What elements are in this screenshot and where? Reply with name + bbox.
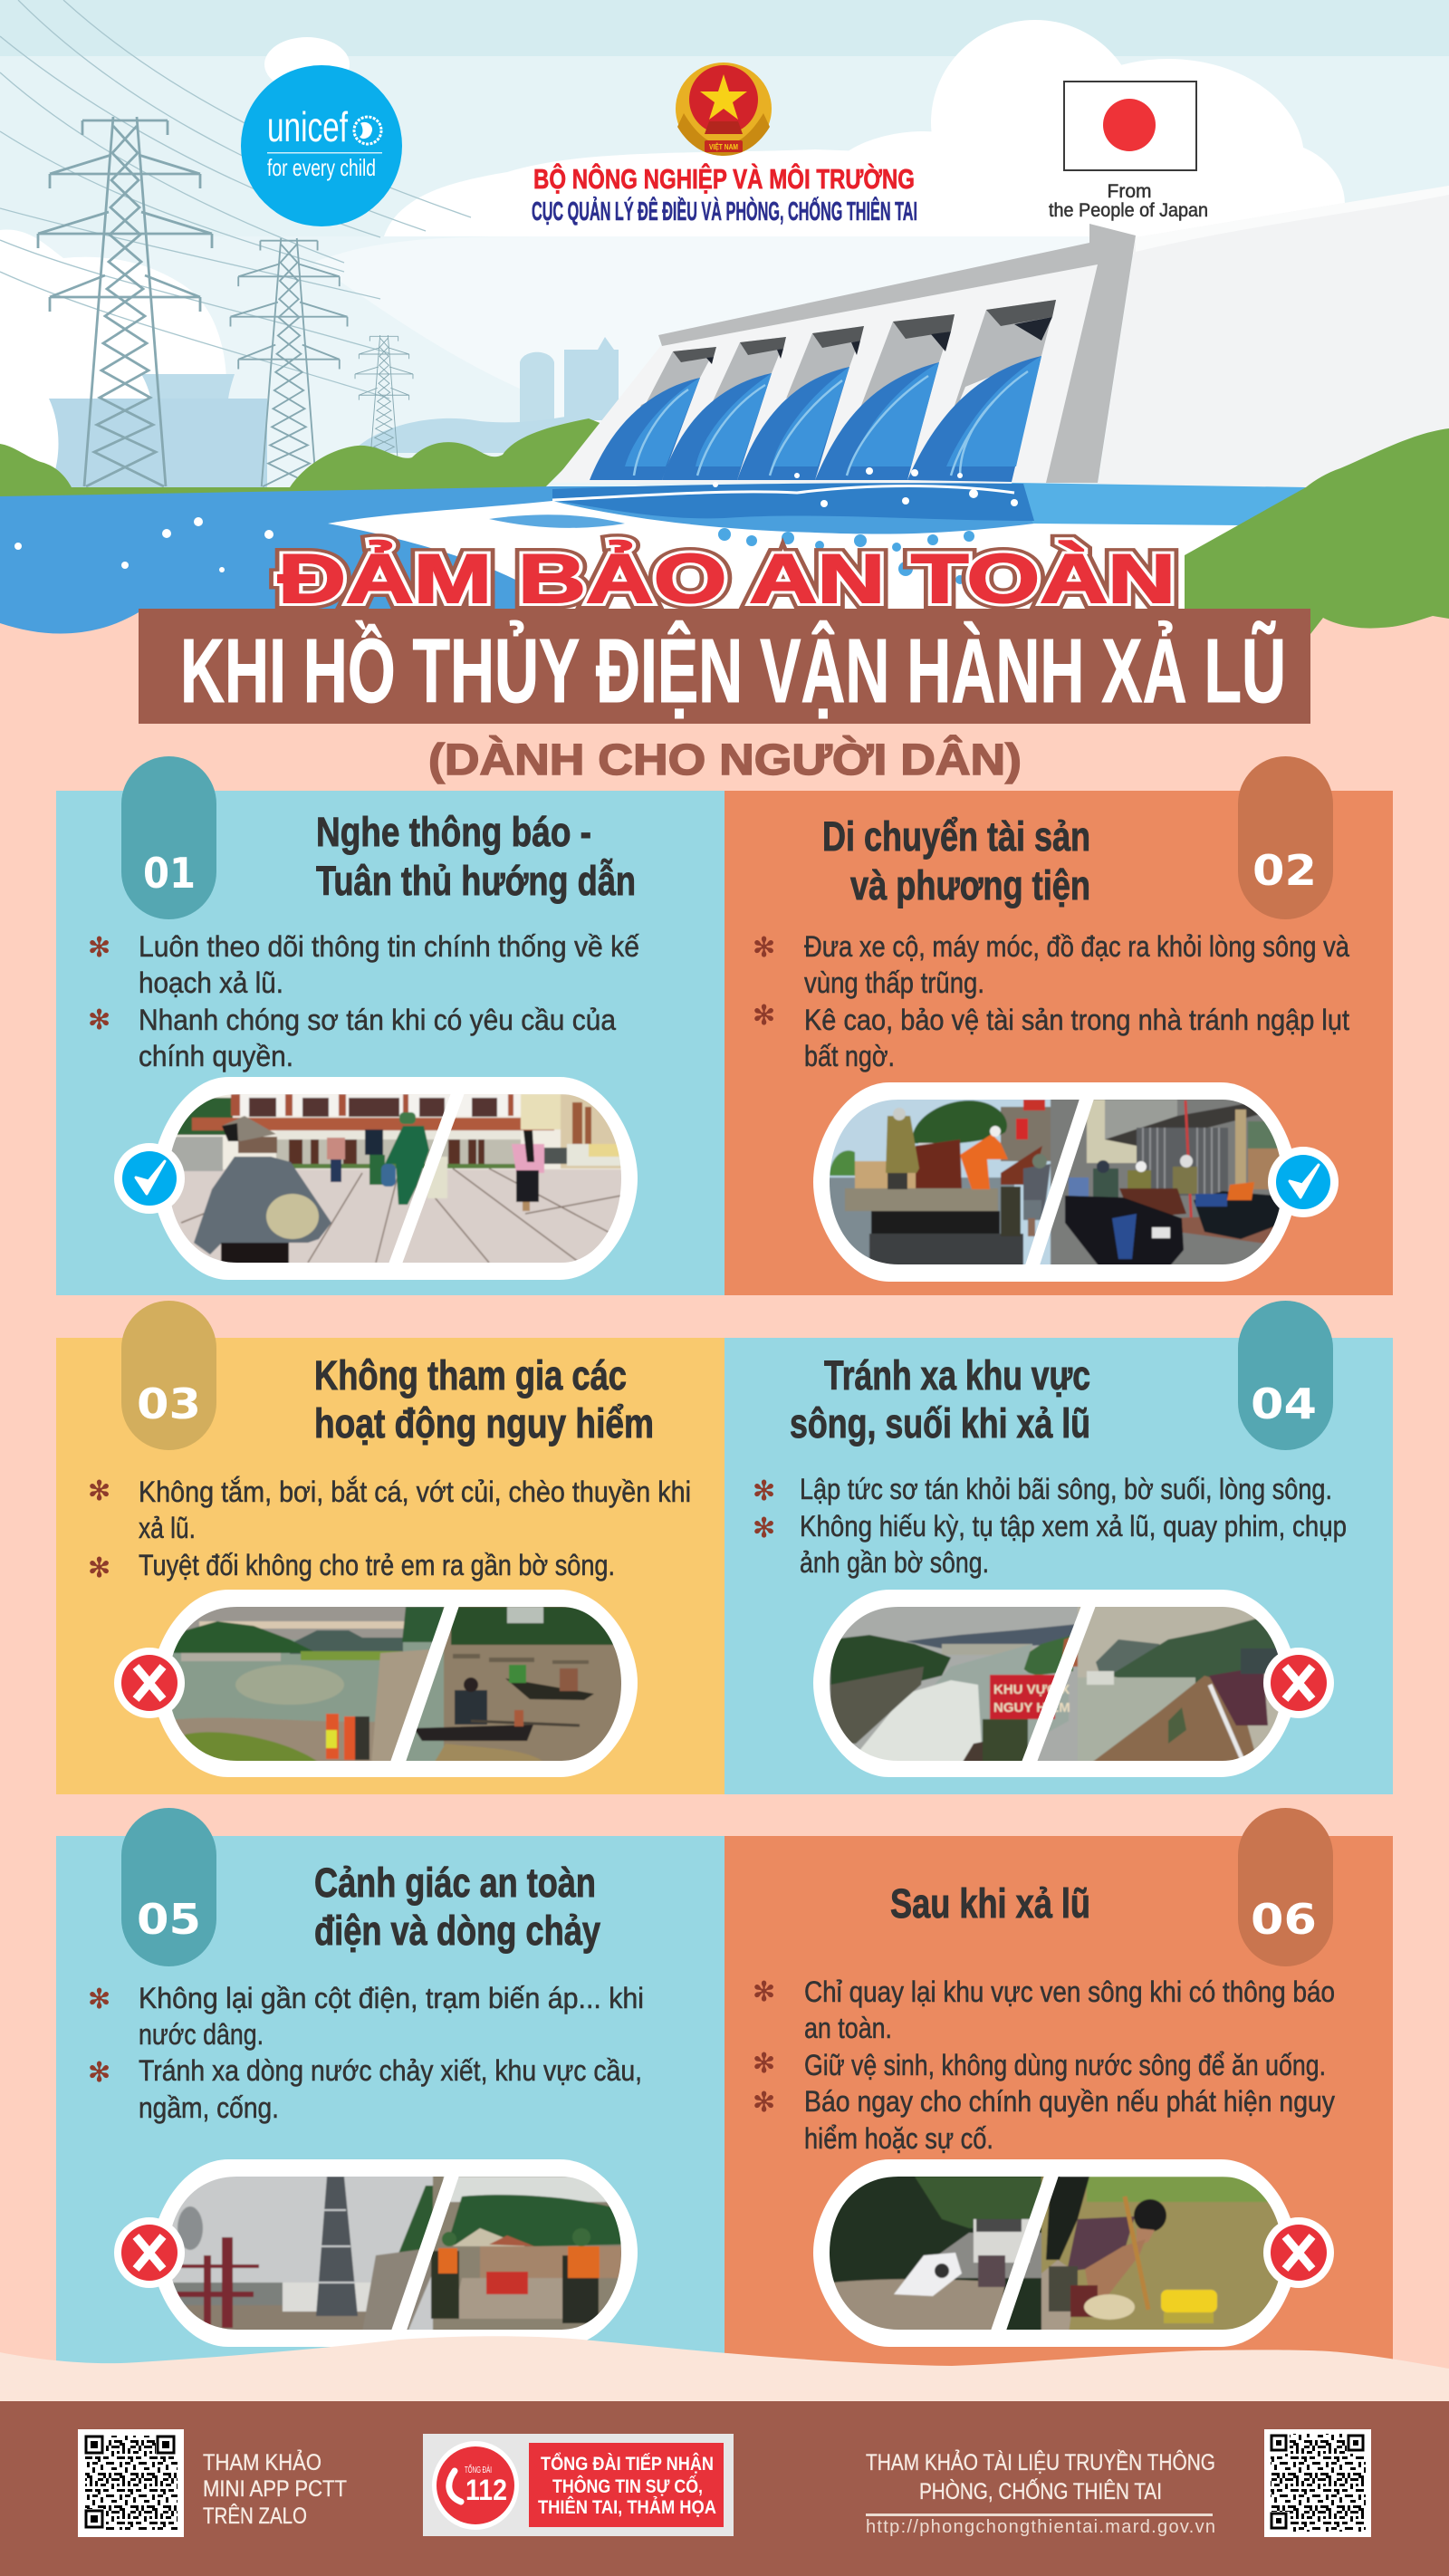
- bullet text 06: ✻: [753, 2048, 775, 2080]
- panel 02: move property and vehicles: [724, 756, 1393, 1295]
- heading 01: Nghe thông báo -: [316, 809, 591, 855]
- diagonal slash 03: [389, 1603, 460, 1764]
- bullet text 04: [753, 1473, 1347, 1579]
- ministry name: CỤC QUẢN LÝ ĐÊ ĐIỀU VÀ PHÒNG, CHỐNG THIÊN TAI: [532, 196, 917, 226]
- photo capsule 04: [813, 1590, 1334, 1777]
- bullet text 06: an toàn.: [804, 2012, 892, 2044]
- cooling towers and city skyline: [49, 337, 619, 487]
- heading 06: Sau khi xả lũ: [890, 1880, 1090, 1927]
- bullet text 02: ✻: [753, 1000, 775, 1032]
- bullet text 06: Chỉ quay lại khu vực ven sông khi có thông báo: [804, 1975, 1335, 2008]
- heading 03: hoạt động nguy hiểm: [314, 1400, 654, 1447]
- bottom cream wave: [0, 2336, 1449, 2409]
- panel 04: stay away from rivers: [724, 1301, 1393, 1794]
- number pill 04: [1238, 1301, 1333, 1450]
- bullet text 01: hoạch xả lũ.: [139, 966, 283, 999]
- heading 05: Cảnh giác an toàn: [314, 1860, 596, 1906]
- dam: [552, 186, 1449, 487]
- bullet text 03: ✻: [88, 1552, 110, 1584]
- bullet text 04: Không hiếu kỳ, tụ tập xem xả lũ, quay phim, chụp: [800, 1510, 1347, 1543]
- heading 01: Tuân thủ hướng dẫn: [316, 858, 636, 904]
- hotline 112 box: THÔNG TIN SỰ CỐ,: [552, 2475, 703, 2497]
- bullet text 02: [753, 930, 1349, 1072]
- bullet text 01: Luôn theo dõi thông tin chính thống về kế: [139, 930, 639, 963]
- heading 02: và phương tiện: [850, 862, 1090, 908]
- photo capsule 01: [114, 1077, 638, 1280]
- photo capsule 04: KHU VỰC X: [993, 1682, 1070, 1697]
- bullet text 06: [753, 1975, 1335, 2155]
- bullet text 06: ✻: [753, 1976, 775, 2008]
- pylons: [38, 117, 212, 486]
- diagonal slash 04: [1021, 1603, 1097, 1764]
- left footer text: [203, 2448, 347, 2529]
- ministry name: [532, 162, 917, 226]
- title line 1: ĐẢM BẢO AN TOÀN: [278, 541, 1176, 618]
- check badge 01: [114, 1143, 185, 1214]
- lake: [0, 486, 1306, 652]
- header illustration: hydropower dam scene: [0, 0, 1449, 652]
- logo: UNICEF: for every child: [267, 154, 376, 181]
- logo: UNICEF: [241, 65, 402, 226]
- bullet text 03: ✻: [88, 1475, 110, 1507]
- bullet text 02: Đưa xe cộ, máy móc, đồ đạc ra khỏi lòng sông và: [804, 930, 1349, 963]
- logo: flag of Japan: [1049, 82, 1208, 221]
- left footer text: THAM KHẢO: [203, 2448, 321, 2475]
- title line 1: ĐẢM BẢO AN TOÀN: [278, 541, 1176, 618]
- heading 03: Không tham gia các: [314, 1352, 627, 1399]
- bullet text 01: ✻: [88, 932, 110, 964]
- number pill 03: 03: [137, 1379, 201, 1428]
- number pill 02: [1238, 756, 1333, 919]
- heading 05: [314, 1860, 600, 1954]
- diagonal slash 05: [390, 2173, 460, 2333]
- bullet text 01: [88, 930, 639, 1072]
- title line 1: ĐẢM BẢO AN TOÀN: [278, 541, 1176, 618]
- bullet text 04: ảnh gần bờ sông.: [800, 1546, 989, 1579]
- bullet text 02: bất ngờ.: [804, 1040, 895, 1072]
- bullet text 05: [88, 1982, 644, 2124]
- spillway water: [590, 356, 1041, 482]
- left footer text: MINI APP PCTT: [203, 2476, 347, 2502]
- right footer text: THAM KHẢO TÀI LIỆU TRUYỀN THÔNG: [866, 2448, 1215, 2475]
- diagonal slash 01: [388, 1091, 465, 1266]
- panel 01: listen to announcements: [56, 756, 724, 1295]
- heading 05: điện và dòng chảy: [314, 1908, 600, 1954]
- right footer text: http://phongchongthientai.mard.gov.vn: [866, 2517, 1215, 2537]
- hotline 112 box: TỔNG ĐÀI TIẾP NHẬN: [541, 2453, 714, 2475]
- left footer text: TRÊN ZALO: [203, 2503, 307, 2529]
- panel 03: avoid dangerous activities: [56, 1301, 724, 1794]
- green bushes: [0, 418, 607, 489]
- photo capsule 04: NGUY HIỂM: [993, 1699, 1070, 1716]
- right footer text: PHÒNG, CHỐNG THIÊN TAI: [919, 2477, 1162, 2504]
- warning badge 03: [114, 1648, 185, 1718]
- panel 06: after flood release: [724, 1808, 1393, 2379]
- dam gate shading: [625, 300, 1056, 444]
- hotline 112 box: [423, 2434, 734, 2536]
- right footer text: [866, 2448, 1215, 2537]
- logo: national emblem of Vietnam: [676, 62, 772, 156]
- clouds: [264, 20, 1345, 267]
- number pill 05: 05: [137, 1895, 201, 1944]
- bullet text 04: ✻: [753, 1475, 775, 1507]
- salmon body with wavy top: [0, 609, 1449, 2576]
- logo: flag of Japan: From: [1107, 181, 1152, 202]
- hotline 112 box: TỔNG ĐÀI: [465, 2464, 492, 2475]
- number pill 06: [1238, 1808, 1333, 1966]
- right hill: [1185, 428, 1449, 652]
- bullet text 06: Giữ vệ sinh, không dùng nước sông để ăn uống.: [804, 2049, 1326, 2081]
- bullet text 06: Báo ngay cho chính quyền nếu phát hiện nguy: [804, 2085, 1335, 2118]
- bullet text 03: Không tắm, bơi, bắt cá, vớt củi, chèo thuyền khi: [139, 1475, 691, 1508]
- bullet text 05: Không lại gần cột điện, trạm biến áp... khi: [139, 1982, 644, 2014]
- footer bar: [0, 2401, 1449, 2576]
- warning badge 06: [1263, 2217, 1334, 2288]
- hotline 112 box: 112: [465, 2474, 507, 2506]
- bullet text 01: ✻: [88, 1004, 110, 1036]
- logo: UNICEF: unicef: [267, 103, 348, 150]
- QR code: mini app: [78, 2429, 184, 2537]
- photo capsule 05: [114, 2159, 638, 2347]
- heading 04: sông, suối khi xả lũ: [790, 1400, 1090, 1447]
- heading 03: [314, 1352, 654, 1447]
- check badge 02: [1268, 1147, 1339, 1217]
- photo capsule 02: [813, 1082, 1339, 1282]
- bullet text 03: Tuyệt đối không cho trẻ em ra gần bờ sông.: [139, 1549, 615, 1581]
- bullet text 05: ✻: [88, 1984, 110, 2015]
- photo capsule 03: [114, 1590, 638, 1777]
- bullet text 02: Kê cao, bảo vệ tài sản trong nhà tránh ngập lụt: [804, 1004, 1349, 1036]
- bullet text 06: ✻: [753, 2087, 775, 2119]
- number pill 01: [121, 756, 216, 919]
- warning badge 05: [114, 2217, 185, 2288]
- heading 02: [822, 813, 1090, 908]
- heading 02: Di chuyển tài sản: [822, 813, 1090, 860]
- ministry name: BỘ NÔNG NGHIỆP VÀ MÔI TRƯỜNG: [533, 162, 915, 195]
- hotline 112 box: THIÊN TAI, THẢM HỌA: [538, 2496, 716, 2518]
- number pill 01: 01: [143, 849, 196, 898]
- number pill 04: 04: [1251, 1379, 1317, 1428]
- bullet text 01: chính quyền.: [139, 1040, 293, 1072]
- bullet text 05: ngầm, cống.: [139, 2091, 279, 2124]
- bullet text 04: Lập tức sơ tán khỏi bãi sông, bờ suối, lòng sông.: [800, 1473, 1332, 1505]
- bullet text 02: vùng thấp trũng.: [804, 966, 984, 999]
- bullet text 03: [88, 1475, 691, 1584]
- logo: national emblem of Vietnam: VIỆT NAM: [709, 143, 738, 151]
- subtitle: (DÀNH CHO NGƯỜI DÂN): [428, 735, 1022, 784]
- bullet text 03: xả lũ.: [139, 1512, 196, 1544]
- number pill 02: 02: [1252, 846, 1317, 895]
- bullet text 02: ✻: [753, 932, 775, 964]
- diagonal slash 02: [1024, 1096, 1095, 1268]
- diagonal slash 06: [990, 2173, 1060, 2333]
- QR code: documents: [1264, 2429, 1371, 2537]
- photo capsule 06: [813, 2159, 1334, 2347]
- number pill 06: 06: [1251, 1895, 1317, 1944]
- heading 01: [316, 809, 636, 904]
- logo: flag of Japan: the People of Japan: [1049, 200, 1208, 221]
- bullet text 01: Nhanh chóng sơ tán khi có yêu cầu của: [139, 1004, 616, 1036]
- number pill 03: [121, 1301, 216, 1450]
- panel 05: electrical and current safety: [56, 1808, 724, 2379]
- bullet text 05: nước dâng.: [139, 2018, 264, 2051]
- power cables: [0, 0, 471, 399]
- heading 04: Tránh xa khu vực: [824, 1352, 1090, 1399]
- warning badge 04: [1263, 1648, 1334, 1718]
- bullet text 06: hiểm hoặc sự cố.: [804, 2122, 993, 2155]
- bullet text 05: Tránh xa dòng nước chảy xiết, khu vực cầu,: [139, 2054, 642, 2087]
- bullet text 05: ✻: [88, 2057, 110, 2089]
- bullet text 04: ✻: [753, 1513, 775, 1544]
- number pill 05: [121, 1808, 216, 1966]
- heading 04: [790, 1352, 1090, 1447]
- lake foam and ripples: [1012, 483, 1306, 525]
